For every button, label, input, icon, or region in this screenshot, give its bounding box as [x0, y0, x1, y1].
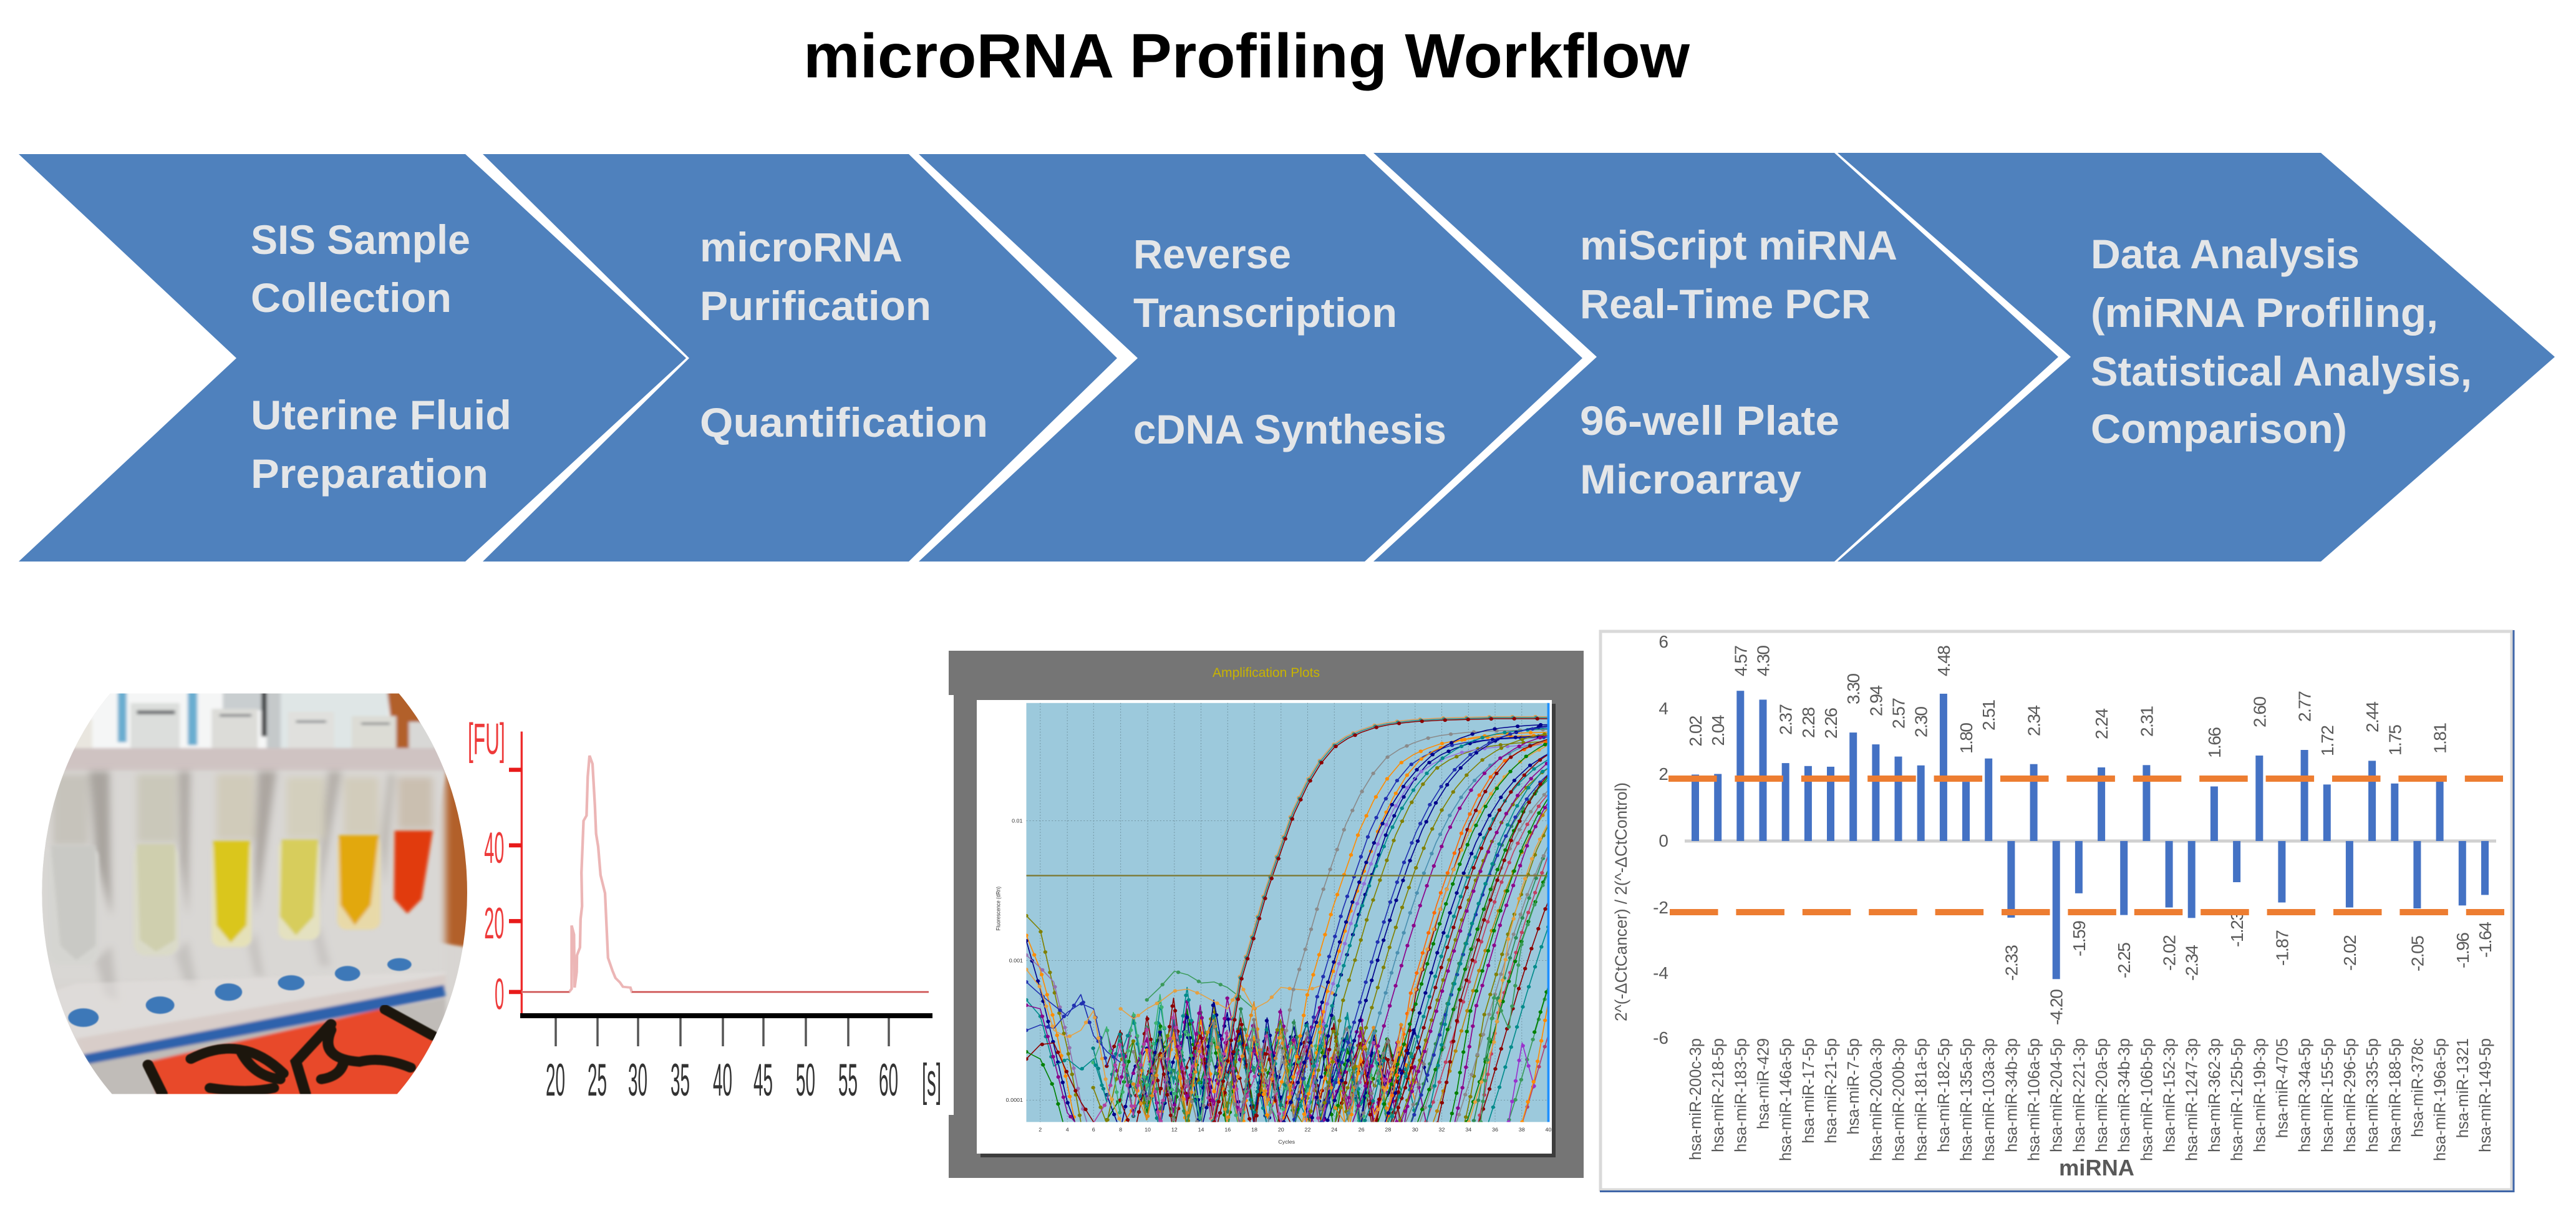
- white backing of electropherogram: [474, 695, 954, 1115]
- category labels: hsa-miR-34b-3p: [2003, 1038, 2020, 1152]
- bar value labels: 2.26: [1821, 708, 1841, 739]
- category labels: hsa-miR-1247-3p: [2184, 1038, 2201, 1161]
- category labels: hsa-miR-335-5p: [2364, 1038, 2381, 1152]
- bar value labels: 1.81: [2431, 723, 2450, 754]
- electropherogram x axis: 50: [796, 1055, 815, 1106]
- amplification axis labels: 22: [1305, 1127, 1311, 1132]
- chevron step 3: reverse transcription: Reverse: [1133, 231, 1291, 277]
- category labels: hsa-miR-183-5p: [1732, 1038, 1750, 1152]
- bar value labels: -1.96: [2453, 933, 2472, 968]
- bar value labels: -2.05: [2408, 936, 2427, 971]
- amplification axis labels: 28: [1385, 1127, 1392, 1132]
- category labels: hsa-miR-125b-5p: [2229, 1038, 2246, 1161]
- chevron step 3: reverse transcription: Transcription: [1133, 289, 1397, 336]
- amplification axis labels: 6: [1092, 1127, 1095, 1132]
- amplification axis labels: 14: [1198, 1127, 1204, 1132]
- category labels: hsa-miR-200c-3p: [1687, 1038, 1705, 1160]
- y axis tick labels: -4: [1653, 963, 1668, 983]
- electropherogram y axis: 40: [484, 824, 504, 873]
- category labels: hsa-miR-218-5p: [1710, 1038, 1727, 1152]
- bar value labels: 2.37: [1776, 704, 1796, 735]
- bar value labels: 4.57: [1731, 646, 1750, 676]
- chevron step 2: microRNA purification: [483, 154, 1117, 562]
- chevron step 1: SIS sample collection: SIS Sample: [251, 216, 470, 263]
- bar value labels: -2.02: [2160, 935, 2179, 971]
- amplification plot panel: [949, 651, 1584, 1178]
- amplification axis labels: 24: [1331, 1127, 1338, 1132]
- bar value labels: 1.75: [2385, 725, 2404, 756]
- y axis tick labels: 0: [1658, 831, 1668, 850]
- category labels: hsa-miR-17-5p: [1800, 1038, 1818, 1144]
- category labels: hsa-miR-429: [1755, 1038, 1773, 1129]
- title: microRNA Profiling Workflow: [803, 21, 1690, 91]
- electropherogram x axis: 35: [671, 1055, 690, 1106]
- amplification axis labels: 16: [1224, 1127, 1231, 1132]
- category labels: hsa-miR-378c: [2409, 1038, 2426, 1137]
- amplification axis labels: 0.001: [1009, 958, 1023, 963]
- data bars: [1692, 691, 2489, 979]
- bar value labels: 2.02: [1686, 716, 1705, 746]
- electropherogram panel: [468, 695, 954, 1115]
- upper noise envelope: [1121, 971, 1334, 1019]
- bar value labels: 1.80: [1957, 723, 1976, 754]
- bar value labels: -4.20: [2047, 990, 2066, 1025]
- threshold dashed lines: [1668, 779, 2504, 912]
- amplification axis labels: 10: [1145, 1127, 1151, 1132]
- blue drops: [68, 958, 412, 1027]
- bar value labels: 2.60: [2250, 697, 2269, 727]
- category labels: [1687, 1038, 2494, 1161]
- chevron step 5: data analysis: Comparison): [2091, 406, 2347, 452]
- amplification axis labels: 4: [1066, 1127, 1069, 1132]
- bar value labels: -2.02: [2340, 935, 2360, 971]
- chevron step 3: reverse transcription: [919, 154, 1582, 562]
- chevron step 5: data analysis: Statistical Analysis,: [2091, 348, 2472, 394]
- bar value labels: 1.66: [2205, 727, 2224, 758]
- amplification axis labels: 2: [1039, 1127, 1042, 1132]
- chevron step 5: data analysis: (miRNA Profiling,: [2091, 289, 2438, 336]
- biohazard symbol: [148, 1009, 433, 1094]
- amplification axis labels: 0.0001: [1006, 1097, 1023, 1103]
- category labels: hsa-miR-196a-5p: [2432, 1038, 2449, 1161]
- y axis tick labels: 2: [1658, 764, 1668, 784]
- amplification axis labels: Fluorescence (dRn): [995, 887, 1001, 930]
- bar value labels: 2.24: [2092, 709, 2111, 739]
- category labels: hsa-miR-7-5p: [1845, 1038, 1862, 1134]
- chevron step 4: real-time PCR: Microarray: [1580, 456, 1801, 502]
- bar value labels: 2.94: [1866, 686, 1886, 716]
- electropherogram x axis: 40: [713, 1055, 732, 1106]
- electropherogram y axis: [468, 715, 523, 1019]
- bar value labels: 2.04: [1708, 715, 1728, 746]
- category labels: hsa-miR-106b-5p: [2138, 1038, 2156, 1161]
- chevron step 2: microRNA purification: Quantification: [700, 399, 988, 445]
- category labels: hsa-miR-135a-5p: [1958, 1038, 1975, 1161]
- bar value labels: 1.72: [2318, 726, 2337, 756]
- y axis tick labels: 4: [1658, 699, 1668, 718]
- chevron step 4: real-time PCR: 96-well Plate: [1580, 397, 1839, 444]
- sparse late curves: [1469, 822, 1549, 1122]
- chevron step 1: SIS sample collection: Uterine Fluid: [251, 392, 511, 438]
- amplification axis labels: 38: [1519, 1127, 1525, 1132]
- zero line: [1685, 840, 2496, 842]
- amplification axis labels: [995, 818, 1552, 1145]
- photo: column tubes with coloured eluates: [42, 694, 467, 1094]
- category labels: hsa-miR-20a-5p: [2093, 1038, 2111, 1152]
- bar value labels: -1.23: [2227, 912, 2247, 947]
- noise curves below threshold: [1092, 987, 1428, 1122]
- electropherogram x axis: 30: [628, 1055, 647, 1106]
- category labels: hsa-miR-106a-5p: [2026, 1038, 2043, 1161]
- category labels: hsa-miR-149-5p: [2477, 1038, 2494, 1152]
- y axis tick labels: 6: [1658, 632, 1668, 651]
- amplification axis labels: 26: [1358, 1127, 1365, 1132]
- category labels: hsa-miR-362-3p: [2206, 1038, 2224, 1152]
- bar value labels: 2.30: [1912, 707, 1931, 737]
- amplification curves chart: [996, 703, 1552, 1144]
- bar value labels: 2.31: [2137, 706, 2156, 737]
- bar chart panel: [1600, 630, 2514, 1192]
- bar value labels: 2.57: [1889, 698, 1909, 729]
- category labels: hsa-miR-34a-5p: [2297, 1038, 2314, 1152]
- category labels: hsa-miR-21-5p: [1823, 1038, 1840, 1144]
- electropherogram x axis: [520, 1013, 941, 1106]
- chevron step 4: real-time PCR: [1373, 153, 2058, 562]
- bar value labels: -2.25: [2114, 943, 2134, 978]
- bar value labels: -1.59: [2070, 921, 2089, 956]
- category labels: hsa-miR-204-5p: [2048, 1038, 2066, 1152]
- category labels: hsa-miR-152-3p: [2161, 1038, 2179, 1152]
- amplification axis labels: 20: [1278, 1127, 1284, 1132]
- electropherogram x axis: 55: [838, 1055, 858, 1106]
- bar value labels: 4.48: [1934, 646, 1954, 676]
- electropherogram y axis: 0: [495, 970, 504, 1019]
- chevron step 4: real-time PCR: miScript miRNA: [1580, 222, 1897, 268]
- white plot sheet with shadow: [977, 700, 1556, 1157]
- amplification axis labels: 0.01: [1012, 818, 1023, 824]
- y axis tick labels: -6: [1653, 1028, 1668, 1048]
- y axis tick labels: -2: [1653, 898, 1668, 917]
- chevron step 5: data analysis: Data Analysis: [2091, 231, 2360, 277]
- bar value labels: [1686, 646, 2495, 1025]
- electropherogram x axis: 25: [588, 1055, 607, 1106]
- category labels: hsa-miR-1321: [2454, 1038, 2472, 1138]
- category labels: hsa-miR-296-5p: [2341, 1038, 2359, 1152]
- bar value labels: -2.34: [2182, 945, 2202, 981]
- y axis tick labels: [1653, 632, 1668, 1048]
- bar value labels: 2.51: [1979, 700, 1998, 731]
- amplification axis labels: 12: [1171, 1127, 1178, 1132]
- bar value labels: 2.77: [2295, 691, 2315, 722]
- amplification axis labels: Cycles: [1278, 1139, 1295, 1145]
- amplification axis labels: 34: [1465, 1127, 1472, 1132]
- chevron step 1: SIS sample collection: Preparation: [251, 450, 488, 497]
- bar value labels: -2.33: [2002, 945, 2021, 981]
- chevron step 5: data analysis: [1838, 153, 2555, 562]
- amplification plot title: Amplification Plots: [1213, 666, 1320, 680]
- electropherogram y axis: [FU]: [468, 715, 505, 764]
- workflow chevrons: [19, 153, 2555, 562]
- left decay curves: [1026, 916, 1121, 1122]
- category labels: hsa-miR-181a-5p: [1913, 1038, 1930, 1161]
- category labels: hsa-miR-103a-3p: [1980, 1038, 1998, 1161]
- electropherogram y axis: 20: [484, 899, 504, 948]
- bar value labels: 2.34: [2025, 706, 2044, 736]
- category labels: hsa-miR-188-5p: [2386, 1038, 2404, 1152]
- bar value labels: -1.87: [2272, 930, 2292, 966]
- soft shadows between tubes: [42, 769, 452, 993]
- chevron step 2: microRNA purification: microRNA: [700, 224, 903, 270]
- chevron step 3: reverse transcription: cDNA Synthesis: [1133, 406, 1446, 452]
- bar value labels: 4.30: [1754, 646, 1773, 676]
- category labels: hsa-miR-155-5p: [2319, 1038, 2336, 1152]
- x axis title: miRNA: [2059, 1155, 2134, 1180]
- electropherogram x axis: 20: [546, 1055, 565, 1106]
- grey frame: [949, 651, 1584, 1178]
- category labels: hsa-miR-19b-3p: [2251, 1038, 2269, 1152]
- amplification axis labels: 18: [1251, 1127, 1257, 1132]
- electropherogram panel: [s]: [922, 1055, 941, 1106]
- amplification axis labels: 40: [1546, 1127, 1552, 1132]
- category labels: hsa-miR-221-3p: [2071, 1038, 2088, 1152]
- category labels: hsa-miR-182-5p: [1935, 1038, 1953, 1152]
- category labels: hsa-miR-200b-3p: [1890, 1038, 1907, 1161]
- chevron step 1: SIS sample collection: Collection: [251, 275, 452, 321]
- amplification axis labels: 36: [1492, 1127, 1498, 1132]
- category labels: hsa-miR-200a-3p: [1867, 1038, 1885, 1161]
- electropherogram x axis: 60: [879, 1055, 898, 1106]
- amplification axis labels: 32: [1439, 1127, 1445, 1132]
- electropherogram x axis: 45: [753, 1055, 773, 1106]
- amplification axis labels: 30: [1412, 1127, 1418, 1132]
- chart frame: [1600, 630, 2514, 1192]
- category labels: hsa-miR-146a-5p: [1778, 1038, 1795, 1161]
- bar value labels: -1.64: [2476, 922, 2495, 958]
- electropherogram trace: [521, 756, 929, 992]
- chevron step 1: SIS sample collection: [19, 154, 686, 562]
- category labels: hsa-miR-4705: [2273, 1038, 2291, 1138]
- category labels: hsa-miR-34b-3p: [2116, 1038, 2133, 1152]
- y axis title: 2^(-ΔCtCancer) / 2(^-ΔCtControl): [1612, 782, 1630, 1021]
- bar value labels: 2.44: [2363, 702, 2382, 732]
- amplification axis labels: 8: [1119, 1127, 1122, 1132]
- chevron step 4: real-time PCR: Real-Time PCR: [1580, 281, 1871, 327]
- chevron step 2: microRNA purification: Purification: [700, 283, 931, 329]
- bar value labels: 2.28: [1799, 708, 1818, 738]
- rising sigmoid curves: [1210, 715, 1547, 1122]
- bar value labels: 3.30: [1844, 674, 1863, 704]
